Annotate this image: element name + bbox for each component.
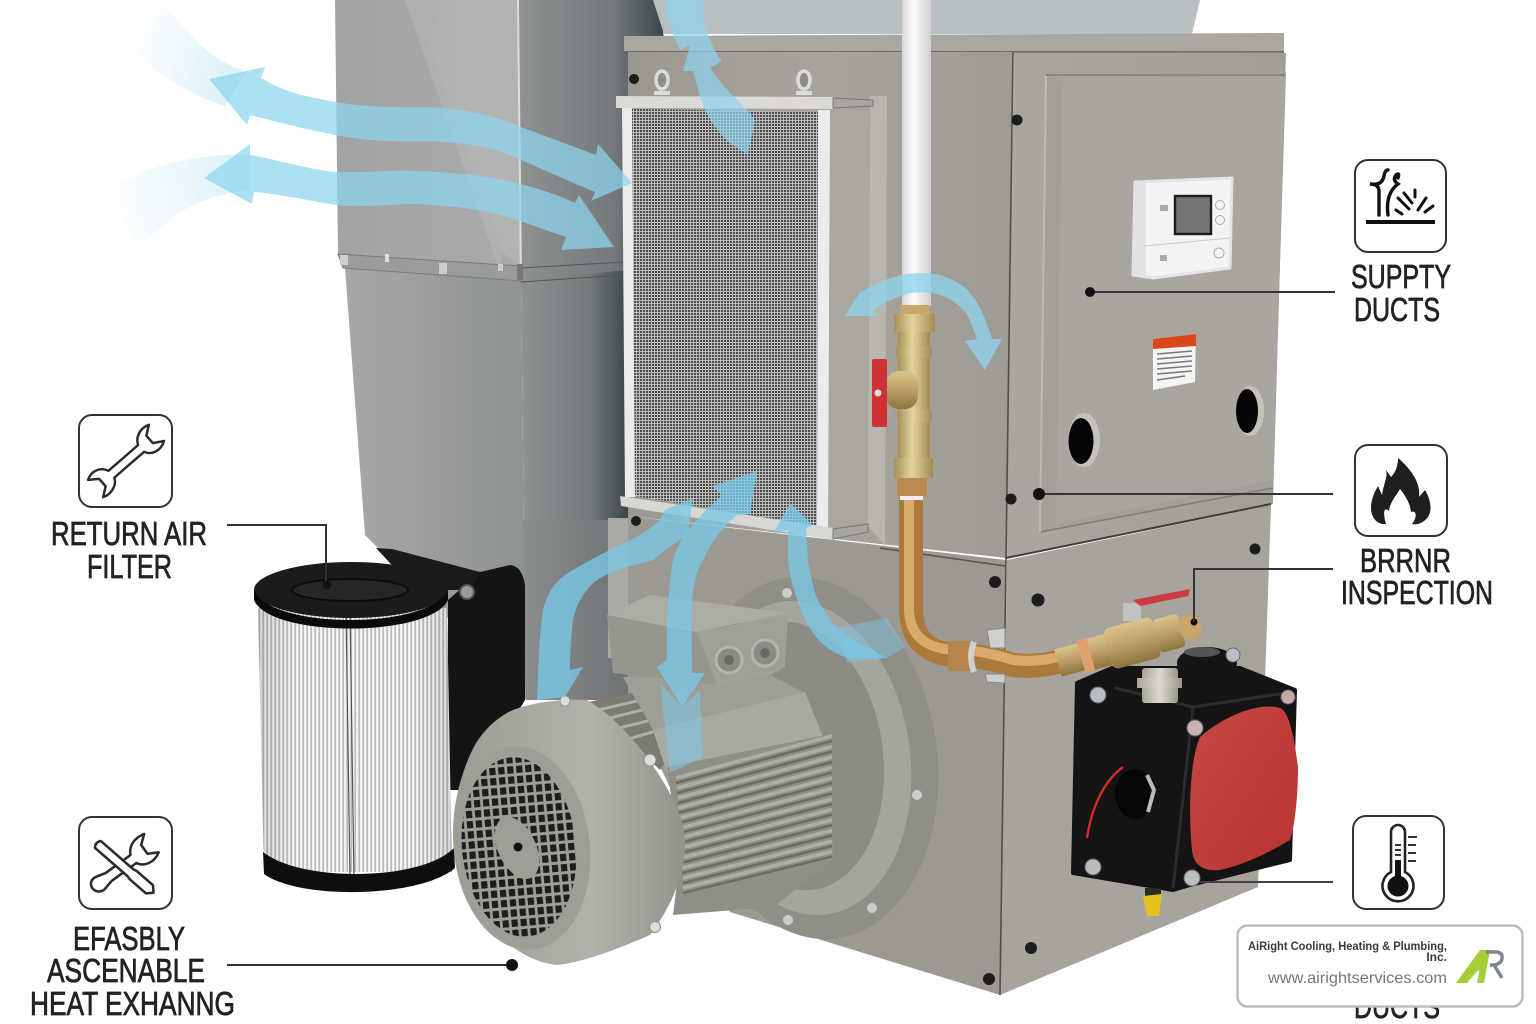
- icon: thermometer: [1353, 816, 1444, 909]
- company card: AiRight Cooling, Heating & Plumbing,: [1248, 939, 1447, 953]
- furnace cabinet: [624, 33, 1286, 995]
- label: supply ducts: SUPPTY: [1351, 258, 1451, 295]
- leader: supply ducts: [1085, 287, 1335, 297]
- burner control box: [1073, 647, 1298, 916]
- copper gas line: [900, 498, 1065, 683]
- label: clipped ducts text: DUCTS: [1354, 988, 1440, 1024]
- label: return air filter: [51, 515, 207, 585]
- cabinet holes: [1068, 386, 1264, 467]
- label: easily accessible heat exchanger: HEAT EXHANNG: [30, 985, 235, 1022]
- label: burner inspection: BRRNR: [1360, 542, 1451, 579]
- label: easily accessible heat exchanger: [30, 920, 235, 1022]
- ball valve on gas line: [1053, 589, 1206, 703]
- cabinet screws: [629, 74, 1260, 985]
- label: return air filter: RETURN AIR: [51, 515, 207, 552]
- company card: www.airightservices.com: [1267, 970, 1447, 987]
- motor flange: [663, 560, 961, 956]
- icon: supply ducts: [1355, 160, 1446, 252]
- airflow arrow: upper left stream: [132, 5, 632, 201]
- icon: flame: [1355, 445, 1447, 536]
- airflow arrow: motor centre: [657, 471, 757, 773]
- return air duct: [335, 0, 664, 700]
- label: burner inspection: [1341, 542, 1493, 611]
- airflow arrow: lower left stream: [107, 144, 614, 250]
- label: supply ducts: DUCTS: [1354, 291, 1440, 328]
- label: easily accessible heat exchanger: EFASBLY: [73, 920, 185, 957]
- leader: burner valve: [1194, 569, 1333, 622]
- label: return air filter: FILTER: [87, 548, 172, 585]
- thermostat: [1133, 178, 1232, 278]
- airflow arrow: motor right: [773, 503, 905, 663]
- brass fittings and shutoff valve: [872, 305, 935, 497]
- company card: [1238, 926, 1522, 1006]
- motor body with cooling fins: [588, 675, 835, 915]
- pleated filter cartridge: [254, 562, 455, 892]
- warning label: [1153, 334, 1196, 390]
- white pipe: [902, 0, 931, 306]
- icon: crossed tools: [79, 817, 172, 909]
- airflow arrow: top plenum: [665, 0, 755, 154]
- airflow arrow: around pipe: [845, 273, 1002, 370]
- leader: heat exchanger: [227, 959, 518, 971]
- company card: Inc.: [1426, 950, 1447, 964]
- company logo: [1456, 950, 1502, 983]
- filter cartridge bracket: [376, 548, 525, 790]
- motor terminal box: [607, 595, 788, 685]
- fan cover: [444, 696, 685, 965]
- airflow arrow: motor left: [537, 498, 693, 700]
- leader: return air filter: [227, 525, 332, 590]
- leader: thermostat limit: [1200, 881, 1333, 883]
- return air filter panel: [616, 71, 887, 546]
- label: supply ducts: [1351, 258, 1451, 328]
- icon: wrench: [79, 415, 172, 507]
- access door panel: [1040, 72, 1286, 532]
- leader: access panel: [1033, 488, 1333, 500]
- funnel plenum on top: [653, 0, 1200, 34]
- label: easily accessible heat exchanger: ASCENABLE: [47, 952, 205, 989]
